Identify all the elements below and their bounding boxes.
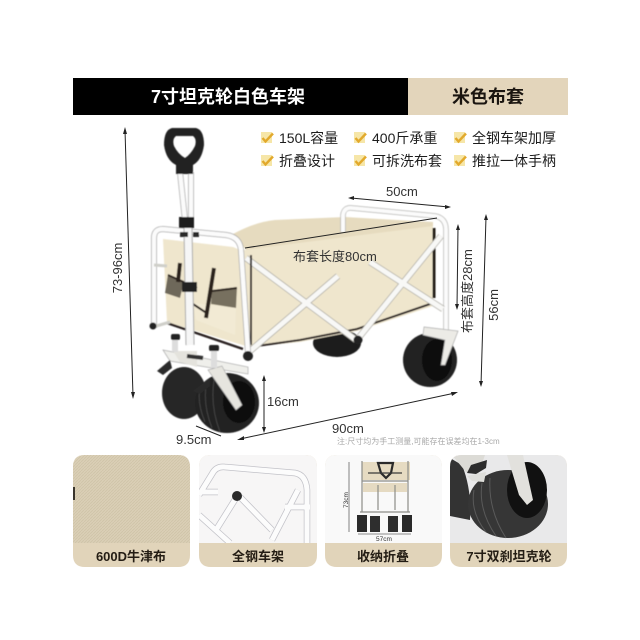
dimension: wheel height [262,375,299,433]
dimension: cover length: 布套长度80cm [293,249,377,264]
panel: folded [325,455,442,567]
title banner [73,78,408,115]
dimension: handle height [110,127,135,399]
dimension: overall height: 56cm [486,289,501,321]
folded wagon photo [325,455,442,543]
colour banner: 米色布套 [452,87,524,107]
feature: capacity: 150L容量 [279,130,338,146]
dimension: wheel height: 16cm [267,394,299,409]
front axle and forks [157,334,248,410]
feature list [261,130,556,169]
cover interior [233,217,433,250]
mesh pockets and straps [165,263,237,335]
dimension: length: 90cm [332,421,364,436]
feature: handle: 推拉一体手柄 [472,153,556,169]
folded wagon photo: 73cm [343,492,350,508]
feature: load: 400斤承重 [372,130,437,146]
title banner: 7寸坦克轮白色车架 [151,86,305,107]
left front wheel [162,367,206,419]
dimension: wheel width [176,426,221,447]
handle poles [180,172,191,345]
cover front panel [163,239,249,347]
fabric swatch [73,455,190,543]
cover side panel [244,226,433,347]
frame photo [199,455,317,543]
caption: 收纳折叠 [357,549,409,564]
panel: oxford fabric [73,455,190,567]
panel: steel frame [199,455,317,567]
scissor braces [246,236,443,351]
right wheel [403,333,457,387]
feature: washable cover: 可拆洗布套 [372,153,442,169]
caption: 7寸双刹坦克轮 [466,549,552,564]
dimension: width [348,184,451,209]
measurement note: 注:尺寸均为手工测量,可能存在误差均在1-3cm [337,436,500,446]
dimension: handle height: 73-96cm [110,243,125,293]
feature: foldable: 折叠设计 [279,153,335,169]
caption: 600D牛津布 [96,549,166,564]
rear wheel [313,329,361,357]
colour banner [408,78,568,115]
right front wheel [195,373,259,433]
dimension: cover length [245,218,437,264]
panel: tank wheel [450,455,567,567]
dimension: width: 50cm [386,184,418,199]
front frame [154,229,248,352]
wheel photo [450,455,567,543]
dimension: cover height: 布套高度28cm [460,249,475,333]
dimension: length [237,392,458,440]
caption: 全钢车架 [232,549,284,564]
feature: steel frame: 全钢车架加厚 [472,130,556,146]
dimension: overall height [479,214,501,387]
dimension: wheel width: 9.5cm [176,432,211,447]
folded wagon photo: 57cm [376,536,392,543]
wagon illustration [150,128,458,433]
rear frame [343,208,446,332]
dimension: cover height [455,224,475,333]
T-handle grip [164,128,204,174]
